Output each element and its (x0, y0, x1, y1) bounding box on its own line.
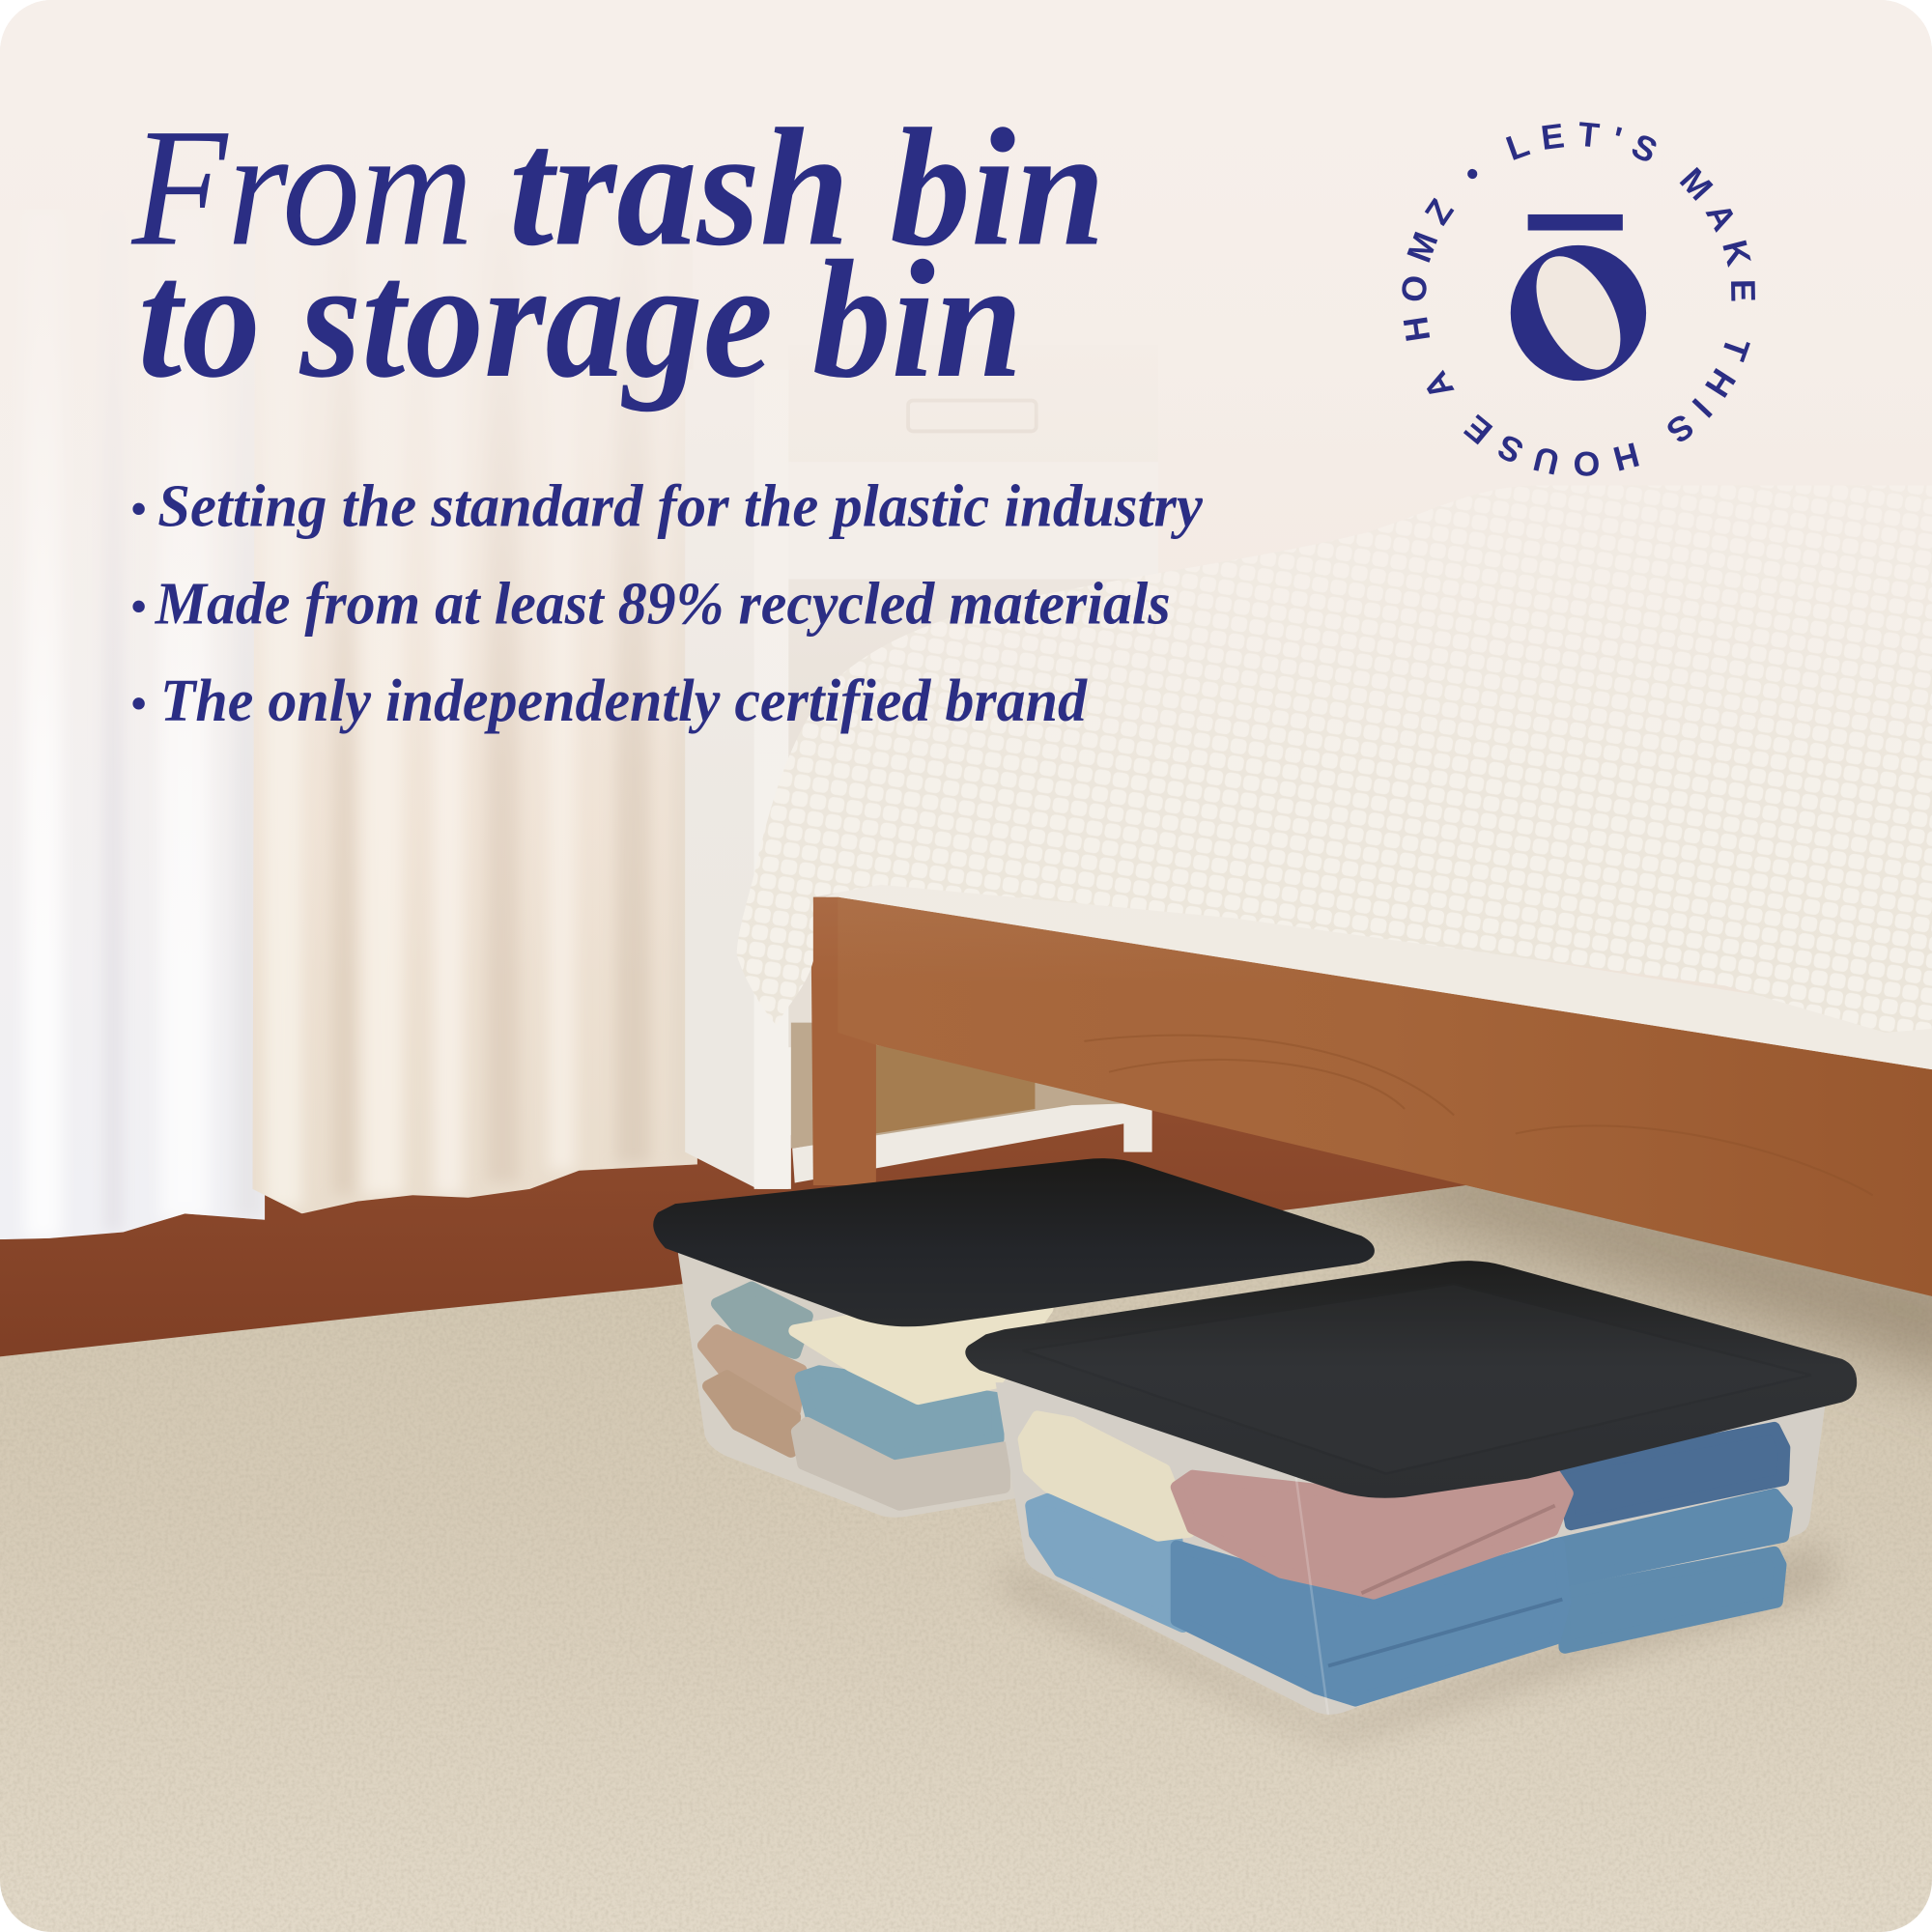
circular slogan: • LET'S MAKE THIS HOUSE A HOMZ (1402, 122, 1755, 476)
blue fold (1328, 1600, 1562, 1665)
blanket (737, 580, 1932, 1032)
bullet list (130, 472, 1203, 734)
wood floor (0, 1111, 1511, 1356)
top fade overlay (0, 0, 1932, 985)
title line 2: to storage bin (138, 225, 1023, 412)
shadow under bed (1282, 1158, 1932, 1392)
front bin shadow (998, 1540, 1836, 1744)
sheer curtain (0, 411, 265, 1240)
bed rail (838, 897, 1932, 1296)
front bin lid inset (1023, 1284, 1811, 1474)
bed leg (810, 897, 876, 1185)
logo badge (1402, 122, 1755, 476)
back bin body (678, 1251, 1035, 1518)
front bin body (996, 1382, 1826, 1715)
front bin (965, 1261, 1857, 1716)
bin vertical corner (1293, 1460, 1328, 1716)
bullet 1: • (130, 484, 146, 533)
bullet 3: • (130, 679, 146, 728)
bullet 2: • (130, 582, 146, 631)
beige curtain (253, 373, 697, 1213)
front bin lid (965, 1261, 1857, 1498)
storage basket (875, 1045, 1035, 1133)
bullet 3: The only independently certified brand (160, 667, 1089, 734)
title words: trash bin: trash bin (509, 94, 1105, 281)
bullet 2: Made from at least 89% recycled materials (155, 569, 1171, 637)
back bin clothes (703, 1288, 1047, 1504)
wood rail grain (1084, 1034, 1759, 1150)
rug texture (0, 1158, 1932, 1932)
headline (131, 94, 1105, 412)
logo mark: o with macron (1511, 214, 1646, 384)
back bin lid (653, 1158, 1375, 1326)
bed sheet (826, 877, 1932, 1069)
rug (0, 1185, 1932, 1932)
front bin clothes (1024, 1417, 1786, 1700)
title word: From: From (131, 94, 473, 281)
drawer handle (908, 401, 1037, 431)
back bin (653, 1158, 1375, 1518)
nightstand (685, 345, 1158, 1189)
bullet 1: Setting the standard for the plastic industry (157, 472, 1203, 540)
pink fold (1361, 1506, 1555, 1593)
wall (1158, 384, 1932, 1069)
